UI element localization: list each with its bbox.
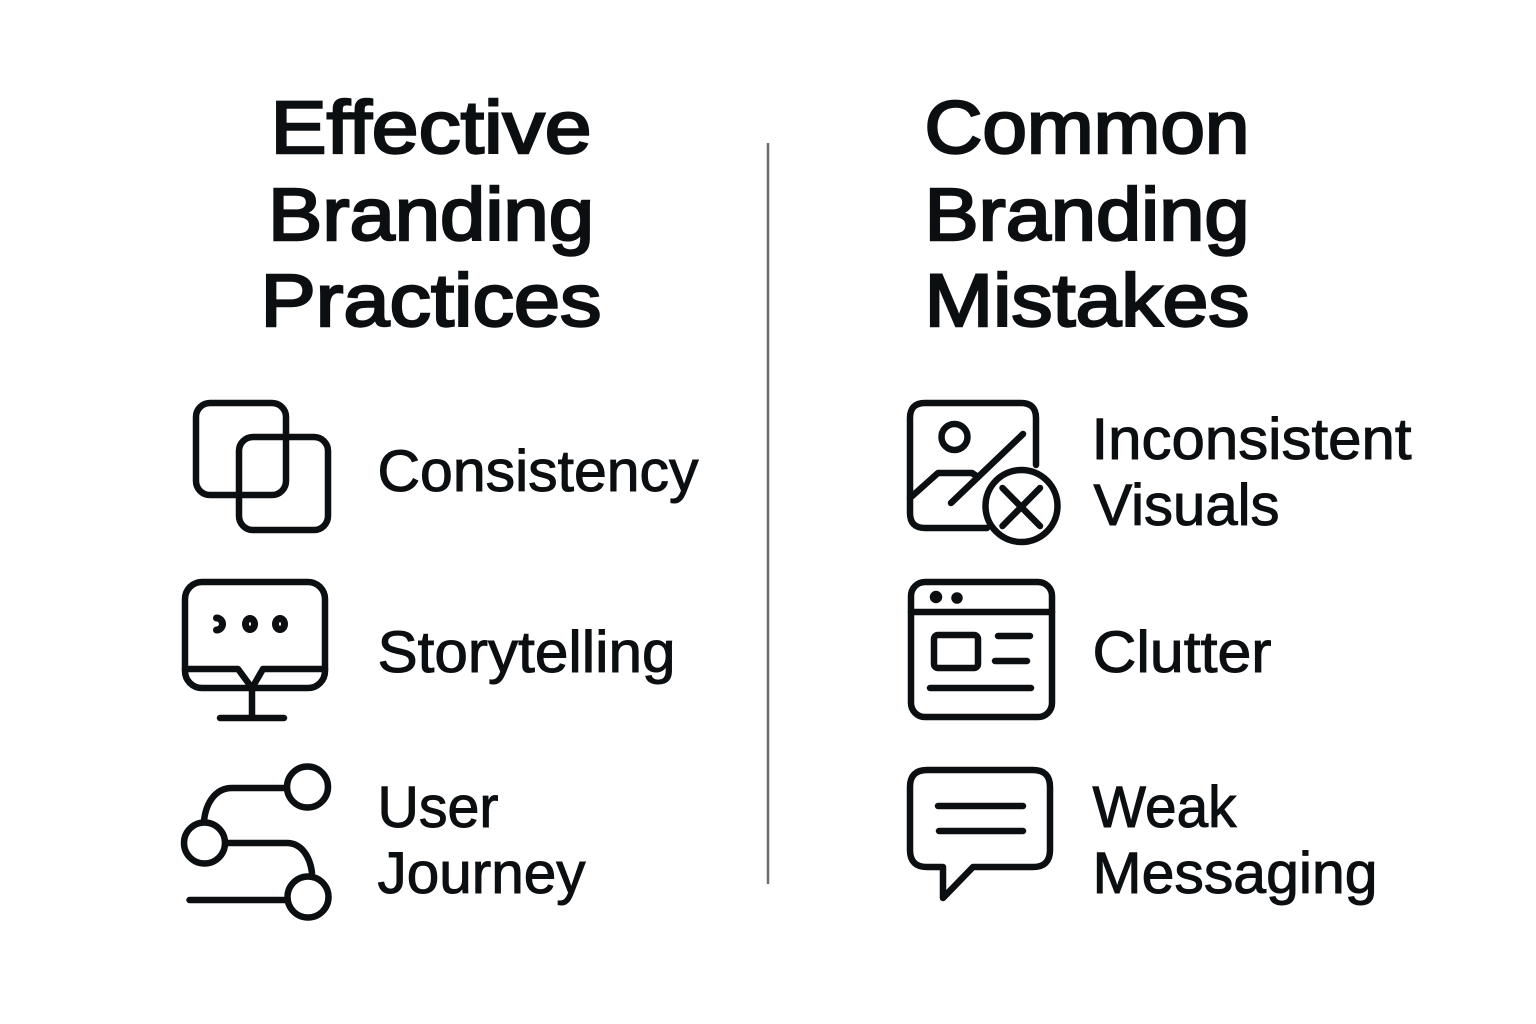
heading: Effective Branding Practices [260,86,602,342]
icon: overlapping squares [196,403,328,530]
icon: user journey path [184,766,328,918]
label: Inconsistent Visuals: Inconsistent [1092,407,1412,472]
icon: speech bubble [910,770,1050,898]
divider [767,143,769,884]
icon: image with error mark [910,403,1058,542]
label: Weak Messaging: Messaging [1092,841,1378,906]
label: Clutter: Clutter [1092,620,1272,685]
label: User Journey: Journey [378,841,586,906]
label: Inconsistent Visuals [1092,407,1412,538]
label: User Journey [378,775,586,906]
label: Storytelling: Storytelling [378,620,676,685]
label: Inconsistent Visuals: Visuals [1094,473,1280,538]
label: Weak Messaging: Weak [1092,775,1237,840]
heading: Effective Branding Practices: Practices [260,259,602,342]
icon: monitor with speech bubble [185,582,325,718]
icon: cluttered browser window [911,582,1052,717]
heading: Common Branding Mistakes [924,86,1250,342]
label: Weak Messaging [1092,775,1378,906]
heading: Common Branding Mistakes: Common [924,86,1250,169]
heading: Effective Branding Practices: Effective [270,86,592,169]
heading: Effective Branding Practices: Branding [268,173,594,256]
heading: Common Branding Mistakes: Branding [924,173,1250,256]
label: User Journey: User [378,775,498,840]
label: Consistency: Consistency [378,439,698,504]
heading: Common Branding Mistakes: Mistakes [924,259,1250,342]
